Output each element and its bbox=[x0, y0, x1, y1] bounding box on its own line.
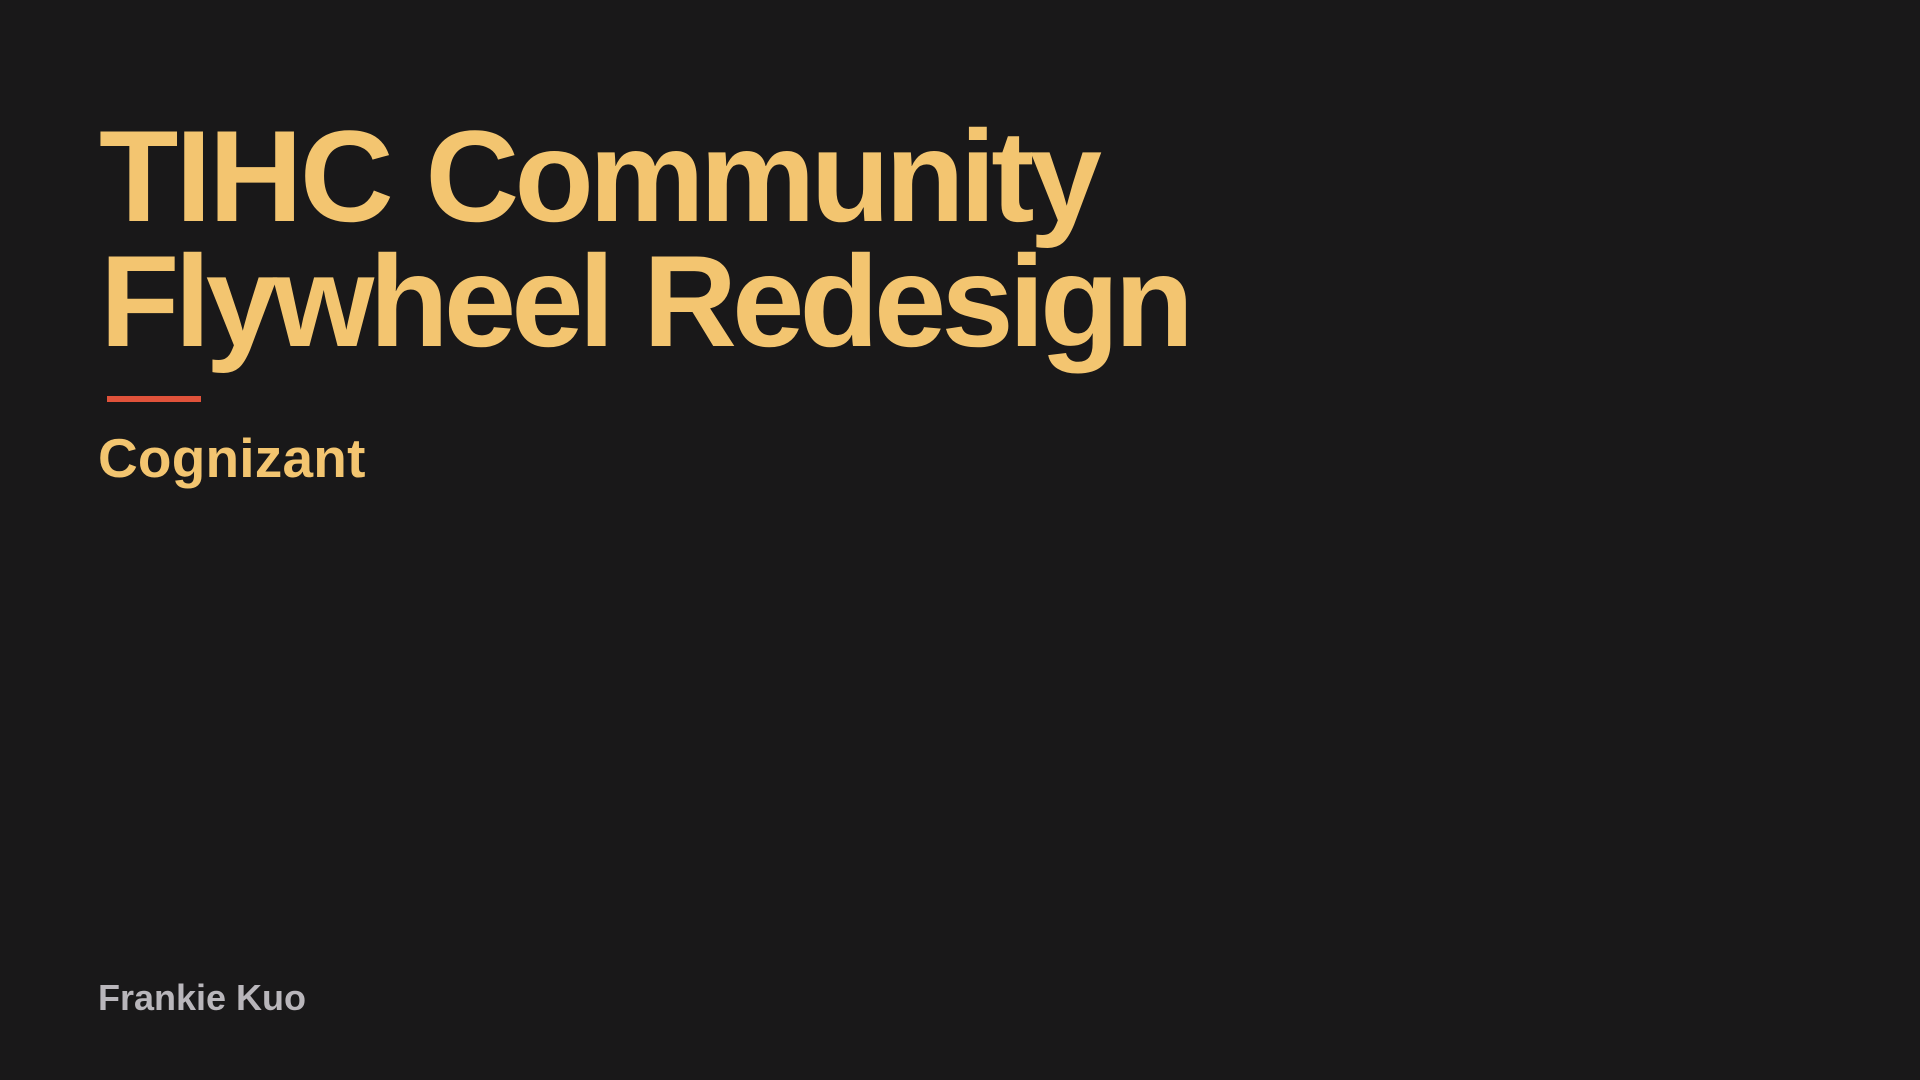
subtitle: company: Cognizant bbox=[98, 427, 366, 489]
author name: Frankie Kuo bbox=[98, 977, 306, 1018]
title: Flywheel Redesign bbox=[100, 228, 1189, 374]
title bbox=[99, 103, 1189, 374]
accent rule bbox=[107, 396, 201, 402]
title: TIHC Community bbox=[99, 103, 1097, 249]
